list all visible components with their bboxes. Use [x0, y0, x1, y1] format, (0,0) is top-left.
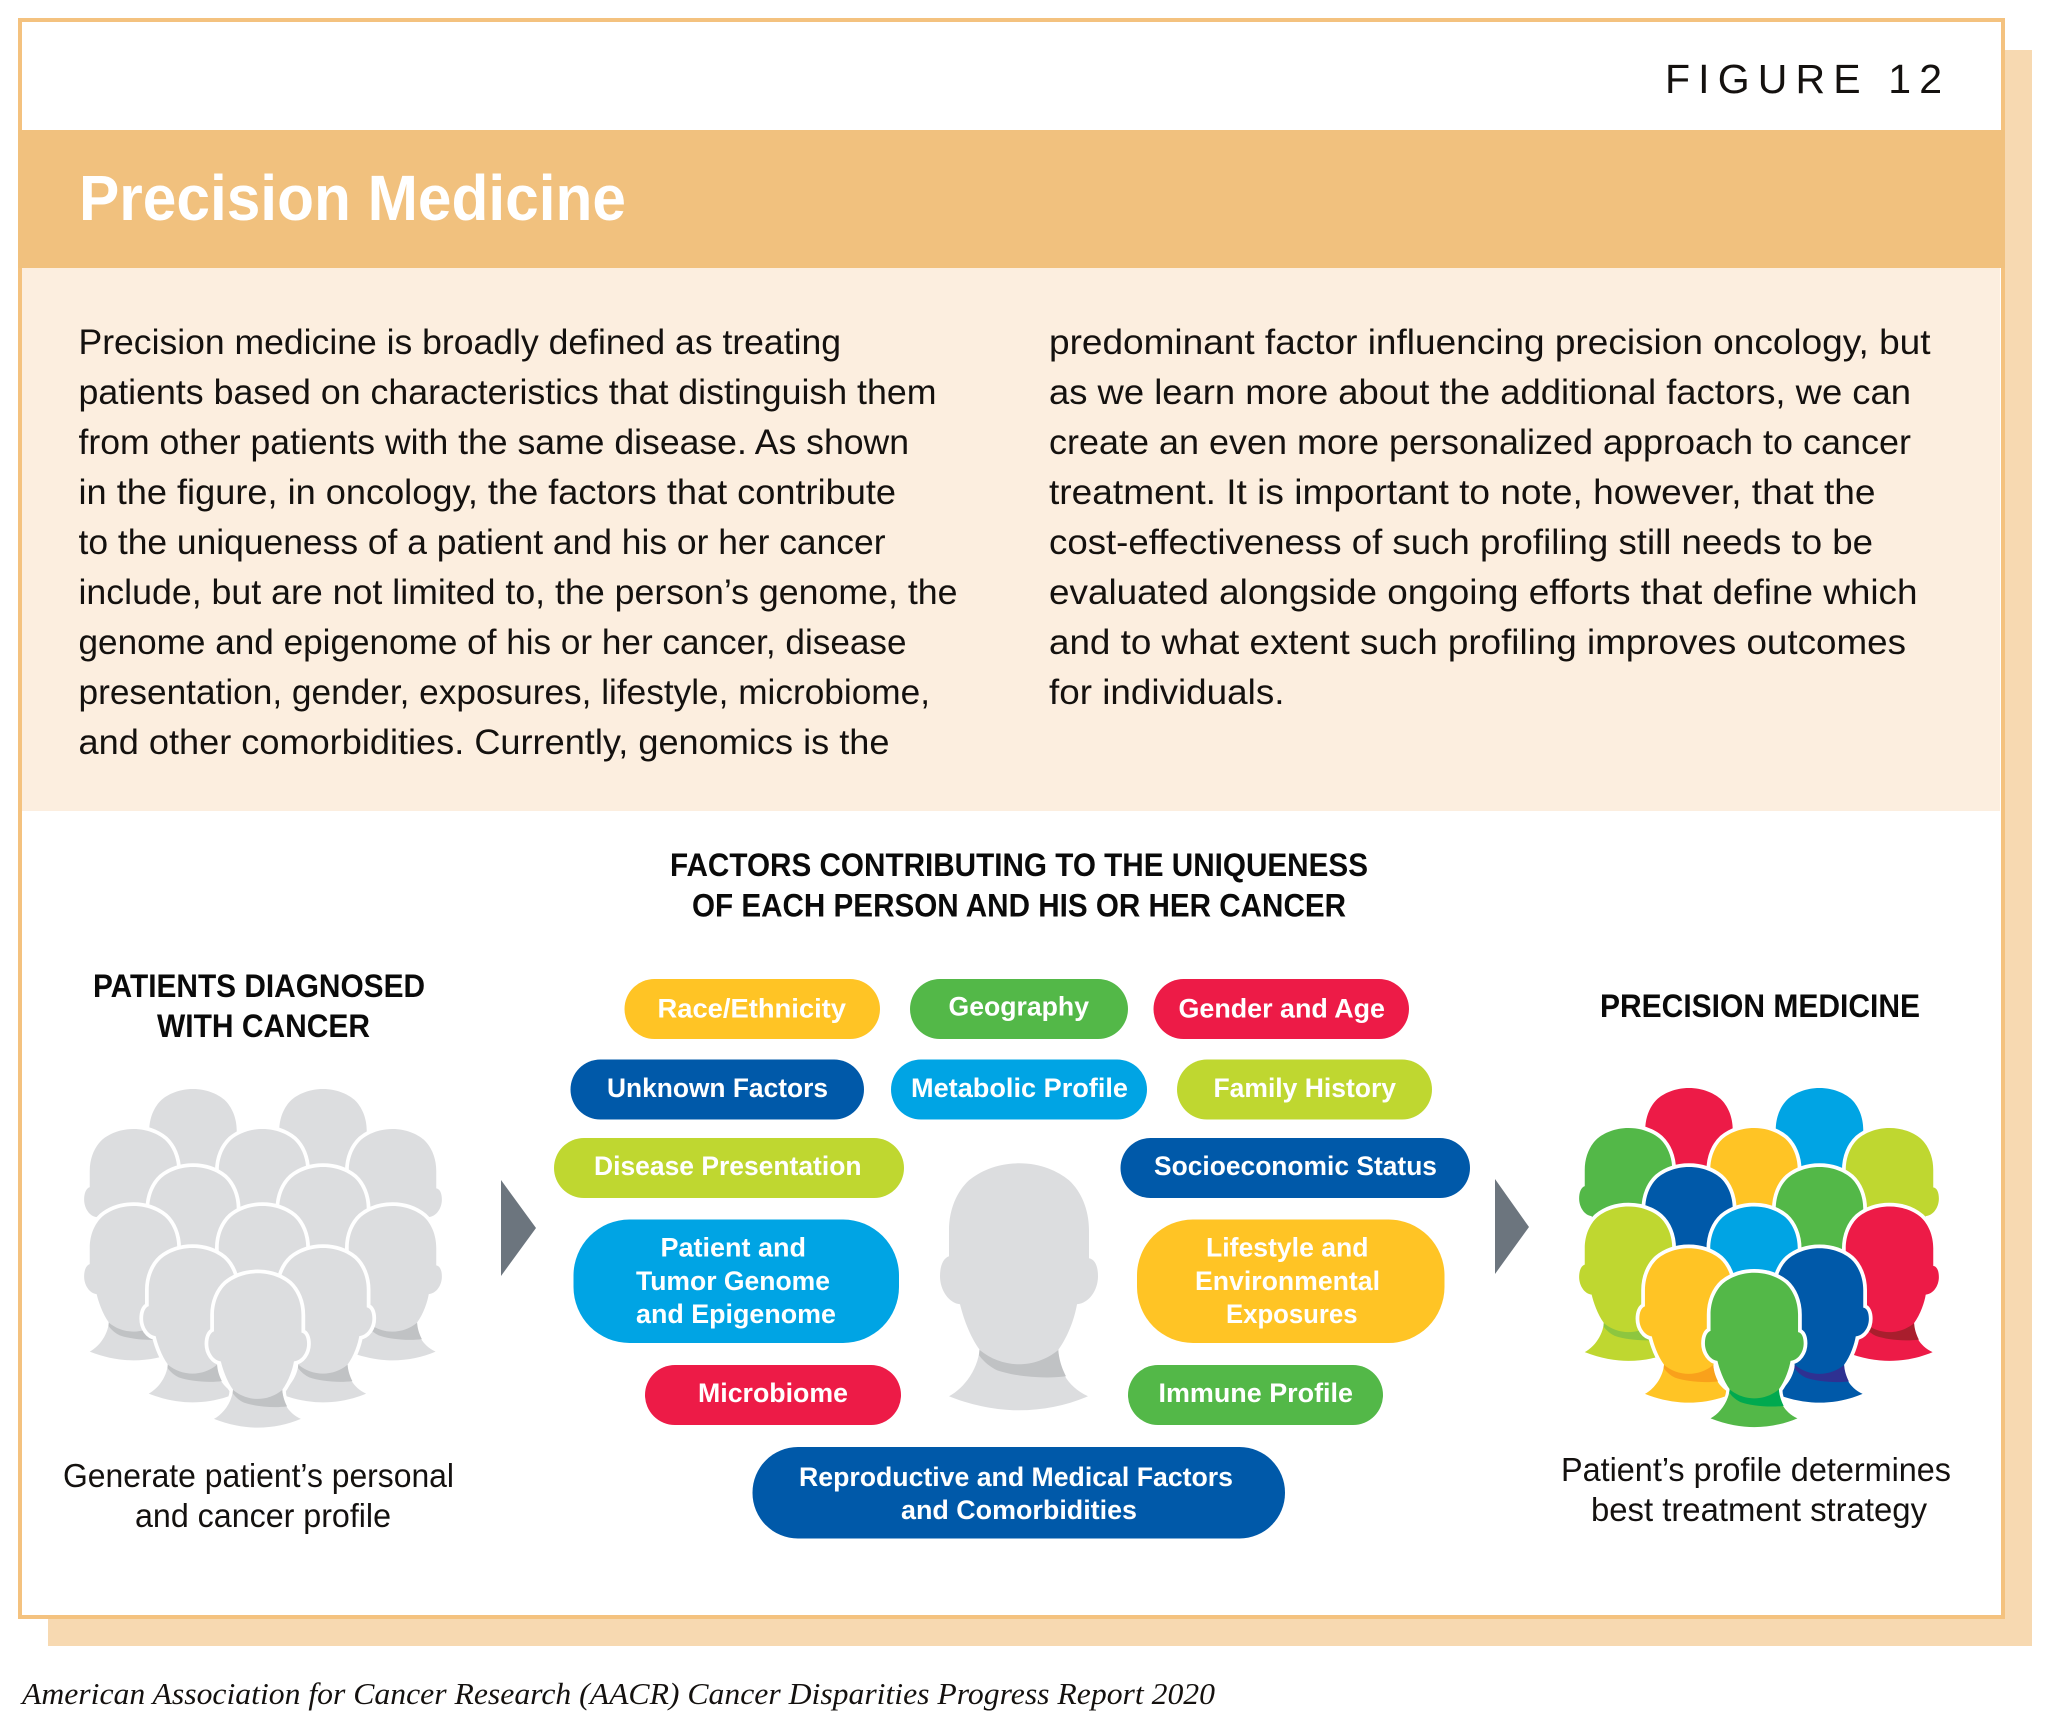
heading: patients diagnosed: PATIENTS DIAGNOSED: [93, 968, 425, 1004]
description right column: [1049, 323, 1931, 712]
arrow: left: [501, 1180, 536, 1276]
heading: patients diagnosed: [93, 968, 425, 1044]
icon: centre head: [940, 1163, 1098, 1410]
pill: lifestyle and environmental exposures: Lifestyle and: [1206, 1232, 1368, 1262]
panel: description: [22, 268, 2000, 811]
caption: treatment strategy: [1561, 1451, 1951, 1528]
description left column: in the figure, in oncology, the factors that contribute: [78, 473, 896, 512]
pill: family history: [1177, 1060, 1432, 1120]
pill: lifestyle and environmental exposures: [1137, 1220, 1444, 1343]
pill: patient and tumor genome and epigenome: Tumor Genome: [636, 1266, 830, 1296]
pill: disease presentation: [554, 1138, 904, 1198]
description left column: from other patients with the same disease. As shown: [78, 423, 909, 462]
description left column: genome and epigenome of his or her cancer, disease: [78, 623, 906, 662]
description right column: predominant factor influencing precision oncology, but: [1049, 323, 1931, 362]
pill: patient and tumor genome and epigenome: Patient and: [660, 1232, 806, 1262]
pill: socioeconomic status: [1120, 1138, 1470, 1198]
description left column: and other comorbidities. Currently, genomics is the: [78, 723, 890, 762]
title: Precision Medicine: [79, 162, 626, 234]
pill: reproductive and medical factors: [752, 1447, 1285, 1538]
arrow: right: [1495, 1179, 1529, 1274]
pill: gender and age: Gender and Age: [1178, 994, 1385, 1024]
pill: patient and tumor genome and epigenome: [574, 1220, 899, 1343]
pill: immune profile: [1128, 1365, 1383, 1425]
pill: geography: [910, 979, 1128, 1039]
caption: generate profile: and cancer profile: [135, 1497, 391, 1534]
caption: treatment strategy: Patient’s profile determines: [1561, 1451, 1951, 1488]
pill: patient and tumor genome and epigenome: and Epigenome: [636, 1299, 836, 1329]
pill: lifestyle and environmental exposures: Exposures: [1226, 1299, 1358, 1329]
caption: generate profile: Generate patient’s personal: [63, 1457, 454, 1494]
pill: race/ethnicity: [624, 979, 880, 1039]
title band: [18, 130, 2005, 268]
pill: geography: Geography: [948, 992, 1089, 1022]
description left column: presentation, gender, exposures, lifestyle, microbiome,: [78, 673, 930, 712]
pill: lifestyle and environmental exposures: Environmental: [1195, 1266, 1380, 1296]
description left column: [78, 323, 958, 762]
pill: unknown factors: Unknown Factors: [607, 1073, 828, 1103]
description left column: patients based on characteristics that distinguish them: [78, 373, 936, 412]
heading: patients diagnosed: WITH CANCER: [157, 1008, 370, 1044]
source citation: American Association for Cancer Research (AACR) Cancer Disparities Progress Report 2020: [20, 1676, 1216, 1711]
description left column: include, but are not limited to, the person’s genome, the: [78, 573, 958, 612]
pill: reproductive and medical factors: Reproductive and Medical Factors: [799, 1462, 1233, 1492]
heading: precision medicine: PRECISION MEDICINE: [1600, 988, 1920, 1024]
pill: family history: Family History: [1214, 1073, 1396, 1103]
description left column: Precision medicine is broadly defined as treating: [78, 323, 841, 362]
pill: microbiome: Microbiome: [698, 1378, 848, 1408]
caption: treatment strategy: best treatment strategy: [1591, 1491, 1927, 1528]
heading: factors: OF EACH PERSON AND HIS OR HER CANCER: [692, 888, 1346, 924]
pill: unknown factors: [570, 1060, 864, 1120]
caption: generate profile: [63, 1457, 454, 1534]
heading: factors: FACTORS CONTRIBUTING TO THE UNIQUENESS: [670, 847, 1368, 883]
description right column: and to what extent such profiling improves outcomes: [1049, 623, 1906, 662]
pill: metabolic profile: [891, 1060, 1147, 1120]
description right column: create an even more personalized approach to cancer: [1049, 423, 1911, 462]
icon: group of coloured heads: [1579, 1088, 1939, 1427]
description right column: evaluated alongside ongoing efforts that define which: [1049, 573, 1918, 612]
heading: factors: [670, 847, 1368, 924]
pill: socioeconomic status: Socioeconomic Status: [1154, 1151, 1437, 1181]
pill: immune profile: Immune Profile: [1158, 1378, 1353, 1408]
description right column: treatment. It is important to note, however, that the: [1049, 473, 1876, 512]
description right column: cost-effectiveness of such profiling still needs to be: [1049, 523, 1873, 562]
figure label: FIGURE 12: [1665, 56, 1942, 102]
description left column: to the uniqueness of a patient and his or her cancer: [78, 523, 886, 562]
pill: disease presentation: Disease Presentation: [594, 1151, 862, 1181]
pill: metabolic profile: Metabolic Profile: [911, 1073, 1128, 1103]
pill: gender and age: [1154, 979, 1409, 1039]
pill: reproductive and medical factors: and Comorbidities: [901, 1495, 1137, 1525]
icon: group of grey heads: [84, 1089, 442, 1428]
description right column: as we learn more about the additional factors, we can: [1049, 373, 1911, 412]
pill: microbiome: [645, 1365, 901, 1425]
description right column: for individuals.: [1049, 673, 1284, 712]
pill: race/ethnicity: Race/Ethnicity: [658, 994, 846, 1024]
